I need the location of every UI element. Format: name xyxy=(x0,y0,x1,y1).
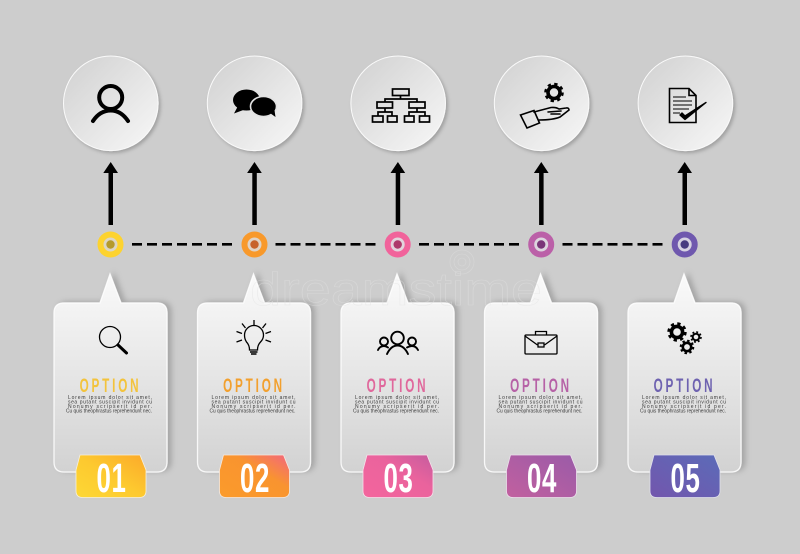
circle: org chart xyxy=(351,56,446,151)
icon: people group xyxy=(378,332,418,354)
icon: light bulb xyxy=(236,320,271,354)
body text 05: Cu quis theophrastus reprehendunt nec. xyxy=(640,408,726,414)
body text 01: Cu quis theophrastus reprehendunt nec. xyxy=(66,408,152,414)
number tab 04: 04 xyxy=(527,456,557,502)
number tab 03 xyxy=(363,455,433,502)
icon: briefcase xyxy=(525,332,557,354)
circle: chat bubbles xyxy=(207,56,302,151)
circle: document with check xyxy=(638,56,733,151)
panel: option 03 xyxy=(341,274,454,502)
heading: option 03: OPTION xyxy=(367,375,428,397)
body text 02: Lorem ipsum dolor sit amet, xyxy=(212,395,296,401)
heading: option 02: OPTION xyxy=(223,375,285,397)
number tab 05 xyxy=(650,455,720,502)
body text 03: Lorem ipsum dolor sit amet, xyxy=(355,395,439,401)
timeline nodes xyxy=(100,234,695,254)
body text 04: Cu quis theophrastus reprehendunt nec. xyxy=(496,408,582,414)
body text 05 xyxy=(640,395,726,414)
number tab 04 xyxy=(506,455,576,502)
dashed timeline xyxy=(132,243,664,246)
watermark: dreamstime xyxy=(250,263,542,315)
number tab 02 xyxy=(220,455,290,502)
heading: option 05: OPTION xyxy=(654,375,715,397)
arrows xyxy=(103,162,692,225)
body text 04: Nonumy scripserit id per. xyxy=(498,404,582,410)
body text 04: Lorem ipsum dolor sit amet, xyxy=(498,395,582,401)
icon: magnifier xyxy=(100,326,126,353)
body text 02: Cu quis theophrastus reprehendunt nec. xyxy=(210,408,296,414)
watermark xyxy=(250,250,542,315)
panel: option 01 xyxy=(54,274,167,502)
body text 01 xyxy=(66,395,152,414)
body text 05: Nonumy scripserit id per. xyxy=(642,404,726,410)
body text 03: Nonumy scripserit id per. xyxy=(355,404,439,410)
number tab 01: 01 xyxy=(97,456,126,502)
body text 02: Nonumy scripserit id per. xyxy=(212,404,296,410)
heading: option 01: OPTION xyxy=(80,375,141,397)
number tab 01 xyxy=(76,455,146,502)
body text 03 xyxy=(353,395,439,414)
icon: gears xyxy=(669,324,701,353)
panel: option 02 xyxy=(198,274,310,502)
panel: option 04 xyxy=(484,274,598,502)
body text 01: sea putant suscipit invidunt cu xyxy=(68,400,152,406)
body text 01: Nonumy scripserit id per. xyxy=(68,404,152,410)
body text 02 xyxy=(210,395,296,414)
circle: user xyxy=(64,56,158,151)
icon circles row xyxy=(64,56,733,151)
number tab 03: 03 xyxy=(384,456,413,502)
body text 04 xyxy=(496,395,583,414)
body text 04: sea putant suscipit invidunt cu xyxy=(498,400,583,406)
number tab 02: 02 xyxy=(240,456,270,502)
body text 05: sea putant suscipit invidunt cu xyxy=(642,400,726,406)
body text 05: Lorem ipsum dolor sit amet, xyxy=(642,395,726,401)
panel: option 05 xyxy=(628,274,741,502)
number tab 05: 05 xyxy=(671,456,700,502)
body text 01: Lorem ipsum dolor sit amet, xyxy=(68,395,152,401)
body text 03: sea putant suscipit invidunt cu xyxy=(355,400,439,406)
body text 02: sea putant suscipit invidunt cu xyxy=(212,400,296,406)
circle: hand with gear xyxy=(494,56,589,151)
body text 03: Cu quis theophrastus reprehendunt nec. xyxy=(353,408,439,414)
heading: option 04: OPTION xyxy=(510,375,572,397)
